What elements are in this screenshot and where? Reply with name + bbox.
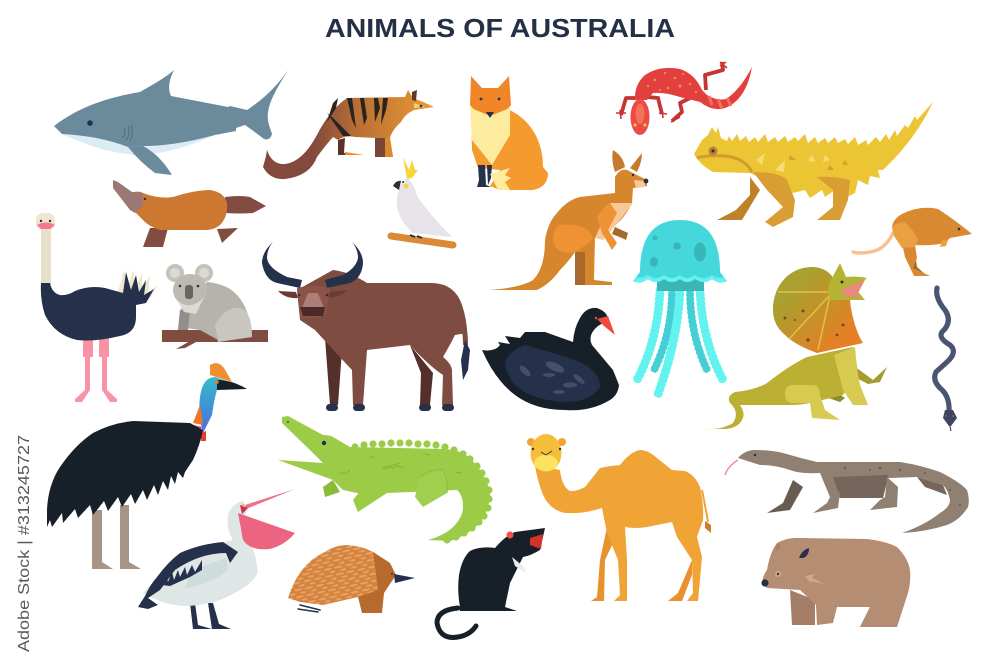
animal: pelican (138, 489, 295, 629)
animal: swan (482, 308, 619, 410)
animal: numbat (263, 90, 434, 179)
animal: frilled lizard (704, 263, 887, 429)
animal: gecko (616, 62, 752, 135)
animal: snake (935, 288, 953, 412)
animal: monitor lizard (725, 450, 969, 533)
animal: wombat (761, 538, 910, 627)
stock id side text: Adobe Stock | #313245727 (16, 435, 33, 652)
animal: cassowary (47, 363, 247, 569)
animal: ostrich (36, 213, 158, 402)
animal: echidna (288, 545, 415, 613)
animal: koala (162, 264, 268, 349)
animal: crocodile (278, 416, 493, 544)
animal: thorny devil (694, 102, 933, 227)
animal: camel (527, 434, 711, 601)
animal: platypus (113, 180, 266, 247)
snake head (943, 410, 957, 431)
animal: bandicoot (853, 208, 972, 276)
title: ANIMALS OF AUSTRALIA (325, 13, 675, 43)
animal: kangaroo (488, 150, 648, 290)
animal: jellyfish (633, 220, 727, 397)
animal: buffalo (262, 242, 470, 411)
animal: cockatoo (391, 157, 453, 245)
animal: fox (470, 76, 548, 190)
animal: tasmanian devil (437, 528, 545, 637)
animal: shark (54, 70, 288, 175)
